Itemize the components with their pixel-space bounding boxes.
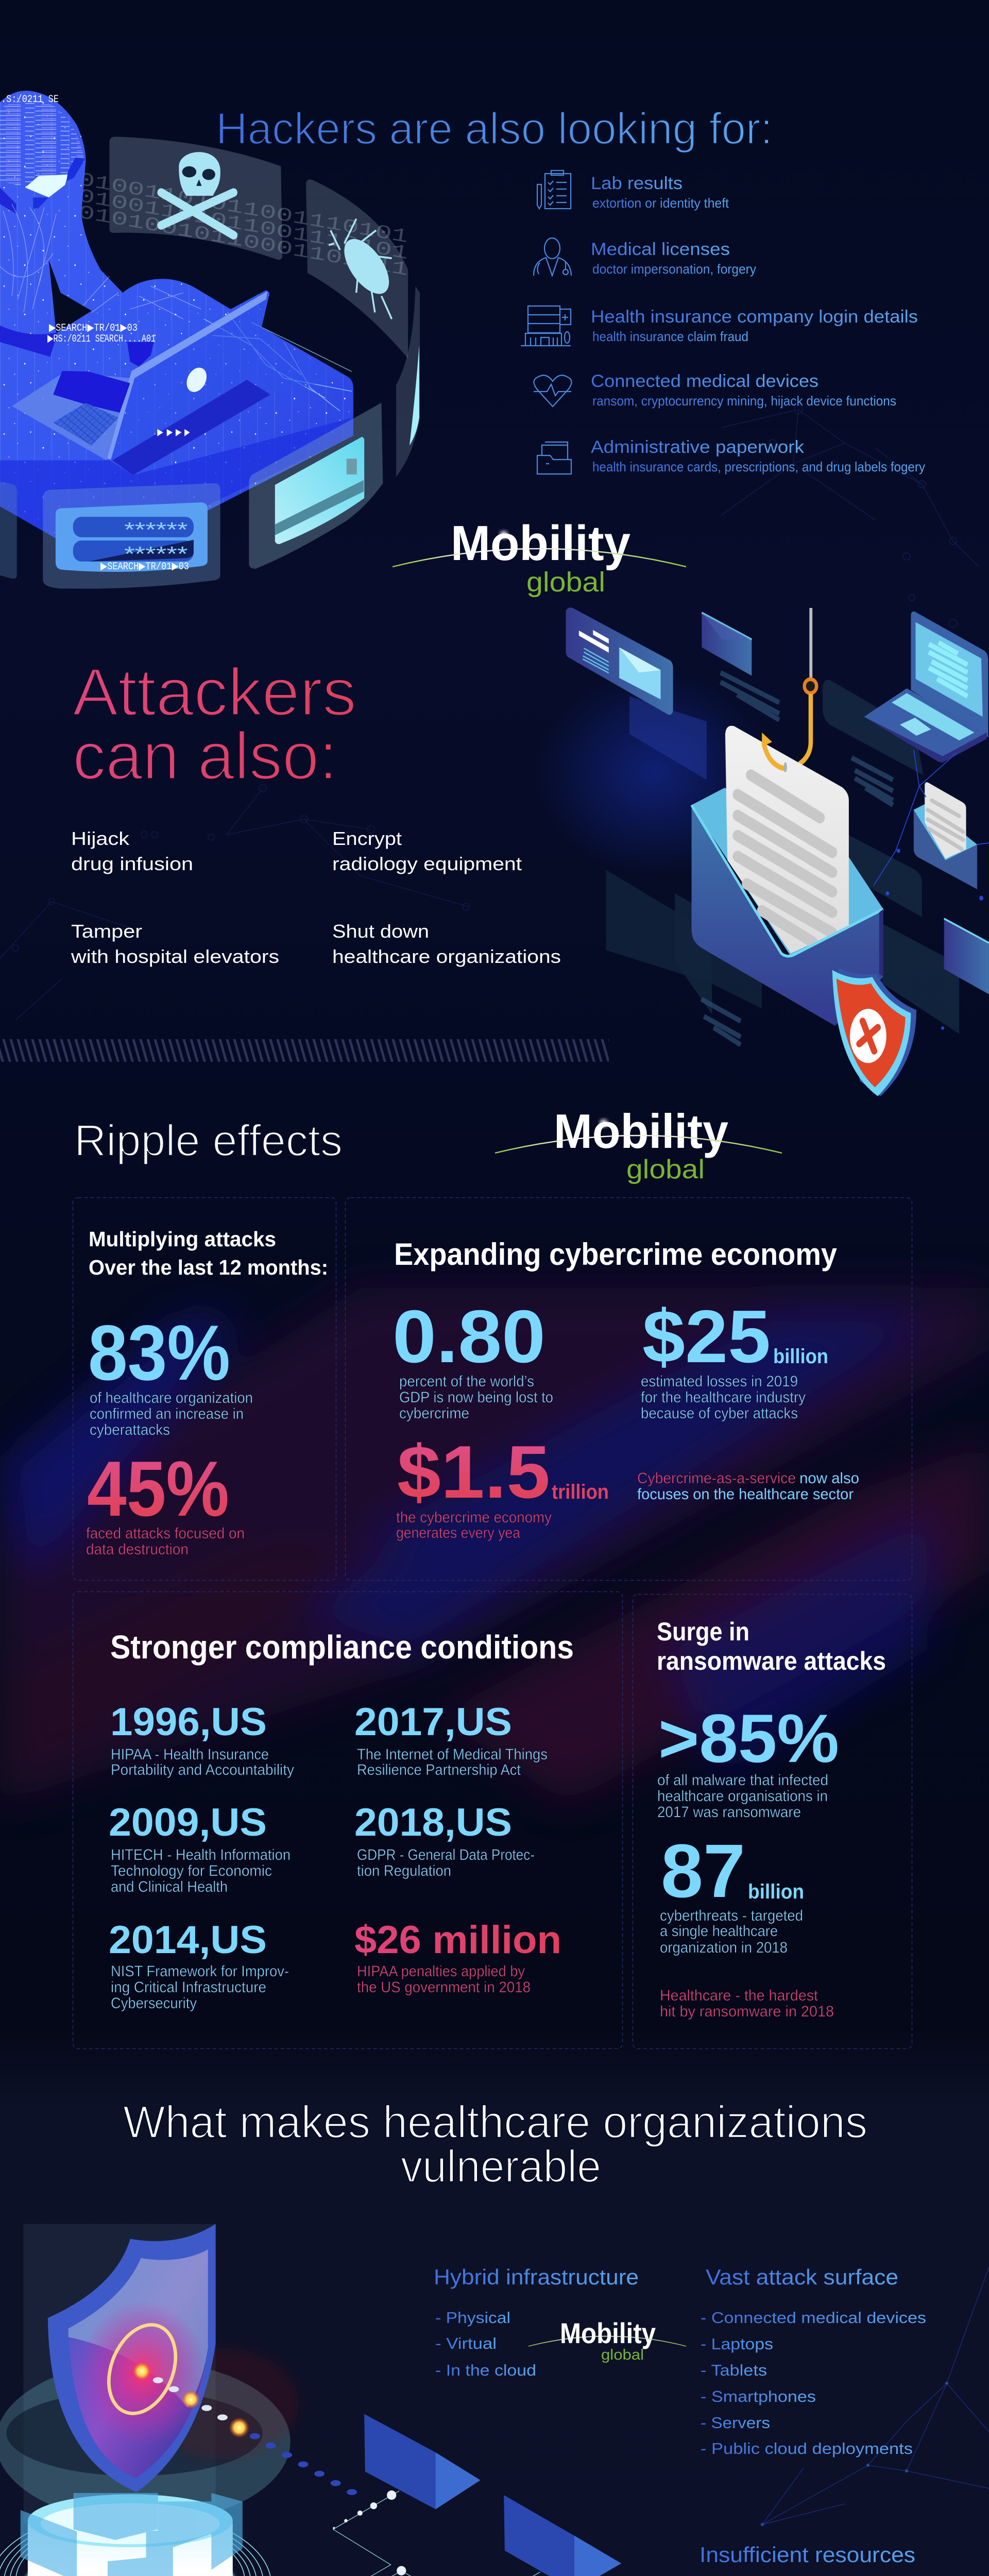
panel: surge in ransomware attacks [633,1594,912,2048]
action: shut down: healthcare organizations [332,946,561,967]
stat: $1.5 trillion: the cybercrime economy [396,1509,552,1526]
panel heading: Expanding cybercrime economy [394,1237,838,1272]
stat: 0.80: percent of the world’s [399,1373,534,1390]
item: 2009 HITECH: Technology for Economic [111,1862,272,1879]
panel heading: Surge in [657,1617,749,1646]
item: administrative paperwork: health insurance cards, prescriptions, and drug labels fogery [592,459,925,474]
binary code stream [77,169,410,281]
icon: red shield with cross [832,968,916,1096]
stat: 83%: 83% [88,1309,230,1397]
notch between arm and torso [49,260,92,332]
item: 2014 NIST: 2014,US [109,1918,267,1962]
action: encrypt [332,828,522,874]
note: cybercrime-as-a-service [637,1470,859,1503]
item: lab results [591,174,729,211]
stat: 0.80 [393,1295,553,1422]
stat: 45%: faced attacks focused on [86,1525,245,1542]
heading: ripple effects: Ripple effects [74,1116,343,1165]
item: $26 million: the US government in 2018 [357,1979,531,1996]
item: medical licenses [591,240,756,277]
logo: Mobility global (top): Mobility [451,516,630,571]
panel heading: Over the last 12 months: [89,1256,328,1279]
stat: $1.5 trillion: $1.5 [397,1430,550,1514]
action: encrypt: radiology equipment [332,853,522,874]
translucent panels [606,680,959,1033]
action: tamper [71,921,279,967]
text line strips [701,673,893,1045]
binary code stream: 01001101011001110101 [77,185,410,265]
logo: Mobility global (ripple): Mobility [554,1104,728,1158]
heading: attackers can also [73,654,356,793]
title: hackers are also looking for: Hackers are also looking for: [216,104,773,154]
note: cybercrime-as-a-service: focuses on the healthcare sector [637,1486,854,1503]
translucent ring around shield [0,2348,299,2523]
panel: bug [306,179,408,359]
stat: over 85%: 2017 was ransomware [657,1804,801,1821]
asterisk password fields: ****** [124,518,188,541]
block: vast attack surface: Vast attack surface [706,2265,898,2289]
data dots trail [132,2362,357,2495]
stat: 45%: 45% [87,1445,229,1533]
heading: attackers can also: can also: [73,718,337,793]
asterisk password fields: ****** [124,543,188,565]
laptop: back view top [364,2414,481,2509]
action: encrypt: Encrypt [332,828,402,849]
stat: 87 billion: a single healthcare [660,1923,778,1940]
logo: Mobility global (ripple): global [626,1155,705,1184]
note: hardest hit: hit by ransomware in 2018 [660,2003,834,2020]
icon: bug [329,219,398,319]
panel heading: Multiplying attacks [89,1227,276,1251]
icon: skull and crossbones [161,152,233,235]
action: shut down [332,921,561,967]
binary code stream: 01001101011001110101 [77,169,410,248]
item: 2009 HITECH: 2009,US [109,1801,267,1844]
heading: attackers can also: Attackers [73,654,356,730]
terminal text on illustration: ▶SEARCH▶TR/01▶03 [49,323,138,334]
note: hardest hit [660,1987,834,2020]
block: vast attack surface: - Laptops [701,2335,773,2353]
action: tamper: with hospital elevators [71,946,279,967]
heading: what makes healthcare organizations vulnerable [123,2096,867,2192]
stat: 87 billion: billion [748,1880,804,1903]
note: hardest hit: Healthcare - the hardest [660,1987,819,2004]
item: 2009 HITECH [109,1801,291,1895]
terminal text on illustration: .S:/0211 SE [1,94,59,106]
panel: left edge [0,482,17,579]
background glow behind phishing art [536,670,773,876]
laptop: back view right [504,2495,621,2576]
logo: Mobility global (vulnerable) [528,2317,686,2363]
block: insufficient resources: Insufficient resources [700,2543,915,2567]
stat: 83%: confirmed an increase in [90,1405,244,1422]
stat: 83%: cyberattacks [90,1421,170,1438]
illustration: shield, data cylinder and connected laptops [0,2224,636,2576]
block: hybrid infrastructure: Hybrid infrastructure [434,2265,639,2289]
head streaks [0,100,84,188]
item: 2009 HITECH: HITECH - Health Information [111,1846,291,1863]
block: hybrid infrastructure: - In the cloud [435,2361,536,2379]
glowing data cylinder [21,2493,243,2576]
block: hybrid infrastructure [434,2265,639,2379]
item: 1996 HIPAA: Portability and Accountability [111,1761,294,1778]
stat: 45%: data destruction [86,1541,189,1558]
logo: Mobility global (top): global [526,567,605,598]
icon: doctor [534,238,571,276]
block: vast attack surface: - Connected medical devices [701,2309,926,2327]
item: lab results: extortion or identity theft [592,195,729,211]
stat: $25 billion [641,1295,828,1422]
fine network scribbles [0,204,201,319]
panel: multiplying attacks [73,1197,336,1581]
stat: $1.5 trillion: trillion [552,1481,609,1503]
item: health insurance login [591,307,918,344]
action: hijack: Hijack [71,828,130,849]
item: 2014 NIST: ing Critical Infrastructure [111,1979,266,1996]
small envelope right [914,782,977,889]
glowing network nodes [135,2490,452,2576]
icon: building [521,306,571,346]
terminal text on illustration: ▶RS:/0211 SEARCH....A01 [47,333,156,345]
icon: heart with pulse [534,375,572,406]
item: health insurance login: health insurance claim fraud [592,329,748,344]
action: hijack: drug infusion [71,853,193,874]
block: vast attack surface [701,2265,926,2458]
item: administrative paperwork: Administrative paperwork [591,437,805,457]
item: 2017 IoMT act [354,1700,548,1778]
item: 1996 HIPAA [110,1700,294,1778]
light column [24,2224,216,2523]
terminal text on illustration: ▶SEARCH▶TR/01▶03 [100,561,189,573]
background streaks behind stats [0,1288,989,1803]
concentric circuit rings [0,2510,271,2576]
panel heading: Stronger compliance conditions [110,1629,574,1666]
panel heading [89,1227,328,1279]
item: 2017 IoMT act: Resilience Partnership Act [357,1761,521,1778]
lower torso dark [0,326,58,357]
face highlight [25,175,68,197]
block: vast attack surface: - Public cloud deployments [701,2439,913,2458]
circuit lines [0,2491,540,2576]
stat: $25 billion: $25 [642,1295,771,1378]
item: 2014 NIST: NIST Framework for Improv- [111,1963,289,1980]
icon: shield with target [48,2224,216,2492]
item: 2018 GDPR: GDPR - General Data Protec- [357,1846,535,1863]
background network: attackers [0,785,470,1020]
logo: Mobility global (vulnerable): Mobility [560,2317,656,2349]
action: hijack [71,828,193,874]
note: cybercrime-as-a-service: now also [799,1470,859,1487]
item: 2018 GDPR [354,1801,535,1879]
item: 2018 GDPR: tion Regulation [357,1862,451,1879]
panel: credit card [249,403,383,569]
envelope inside [691,788,883,956]
item: medical licenses: doctor impersonation, forgery [592,261,756,277]
stat: 0.80: GDP is now being lost to [399,1389,553,1406]
block: vast attack surface: - Servers [701,2414,770,2432]
envelope front [691,805,883,1026]
item: 2014 NIST: Cybersecurity [111,1995,197,2012]
small envelope top [702,613,752,676]
logo: Mobility global (ripple) [495,1104,782,1184]
stat: 87 billion: organization in 2018 [660,1939,788,1956]
item: 2017 IoMT act: The Internet of Medical Things [357,1746,548,1763]
icon: clipboard [537,171,571,209]
stat: $25 billion: for the healthcare industry [641,1389,806,1406]
network lines [874,750,989,1029]
item: 2009 HITECH: and Clinical Health [111,1878,228,1895]
hacker and desk block [0,91,353,557]
logo: Mobility global (vulnerable): global [601,2347,644,2363]
stat: 87 billion: cyberthreats - targeted [660,1907,803,1924]
list: attacker actions [71,828,561,967]
panel heading: ransomware attacks [657,1647,886,1675]
panel: stronger compliance conditions [73,1592,622,2048]
item: lab results: Lab results [591,174,683,193]
item: 1996 HIPAA: 1996,US [110,1700,267,1744]
paper document [725,726,849,953]
stat: over 85%: >85% [658,1701,839,1777]
laptop top right [864,612,988,762]
panel heading [657,1617,886,1675]
background network: vulnerable section [761,2267,989,2576]
item: medical licenses: Medical licenses [591,240,730,259]
item: health insurance login: Health insurance company login details [591,307,918,327]
item: 2017 IoMT act: 2017,US [354,1700,512,1744]
stat: over 85%: of all malware that infected [657,1772,828,1789]
stat: 87 billion: 87 [661,1829,745,1913]
stat: 0.80: 0.80 [393,1295,545,1378]
logo: Mobility global (top) [393,516,686,598]
stat: 83% [88,1309,253,1438]
stat: $1.5 trillion: generates every yea [396,1524,520,1541]
stat: $1.5 trillion [396,1430,609,1541]
item: 1996 HIPAA: HIPAA - Health Insurance [111,1746,269,1763]
item: 2014 NIST [109,1918,289,2012]
right envelope fragment [944,919,989,994]
item: connected medical devices: Connected medical devices [591,371,819,391]
stat: 87 billion [660,1829,804,1956]
stat: $25 billion: billion [773,1345,828,1368]
icon: folder [537,442,571,474]
laptop [12,291,347,475]
note: cybercrime-as-a-service: Cybercrime-as-a-service [637,1470,796,1487]
background network: top right [721,405,979,628]
stat: $25 billion: estimated losses in 2019 [641,1373,798,1390]
item: $26 million: HIPAA penalties applied by [357,1963,525,1980]
heading: what makes healthcare organizations vulnerable: What makes healthcare organizations [123,2096,867,2147]
stat: 0.80: cybercrime [399,1405,469,1422]
item: $26 million: $26 million [354,1918,561,1962]
block: hybrid infrastructure: - Physical [435,2309,510,2327]
card with envelope [566,607,673,715]
panel: expanding cybercrime economy [345,1197,912,1581]
item: connected medical devices [591,371,896,409]
item: administrative paperwork [591,437,925,474]
block: vast attack surface: - Smartphones [701,2387,816,2405]
lower block face [0,418,353,557]
illustration: phishing email on hook [566,607,989,1096]
binary code stream: 01010010110001101011 [77,201,410,281]
list: what hackers look for [521,171,925,474]
item: 2018 GDPR: 2018,US [354,1801,512,1844]
panel: login form [43,483,220,589]
stat: over 85%: healthcare organisations in [657,1788,828,1805]
stat: $25 billion: because of cyber attacks [641,1405,798,1422]
terminal text on illustration [1,94,189,573]
stat: 83%: of healthcare organization [90,1389,253,1406]
illustration: hacker at laptop with floating panels [0,91,420,589]
item: $26 million [354,1918,561,1996]
hook line [799,608,816,764]
stat: over 85% [657,1701,839,1821]
asterisk password fields [124,518,188,565]
item: connected medical devices: ransom, cryptocurrency mining, hijack device functions [592,393,896,409]
heading: what makes healthcare organizations vulnerable: vulnerable [401,2141,601,2192]
block: vast attack surface: - Tablets [701,2361,767,2379]
block: hybrid infrastructure: - Virtual [435,2334,497,2352]
action: tamper: Tamper [71,921,142,942]
panel: skull [109,137,282,260]
panel: right sliver [396,286,420,477]
action: shut down: Shut down [332,921,429,942]
